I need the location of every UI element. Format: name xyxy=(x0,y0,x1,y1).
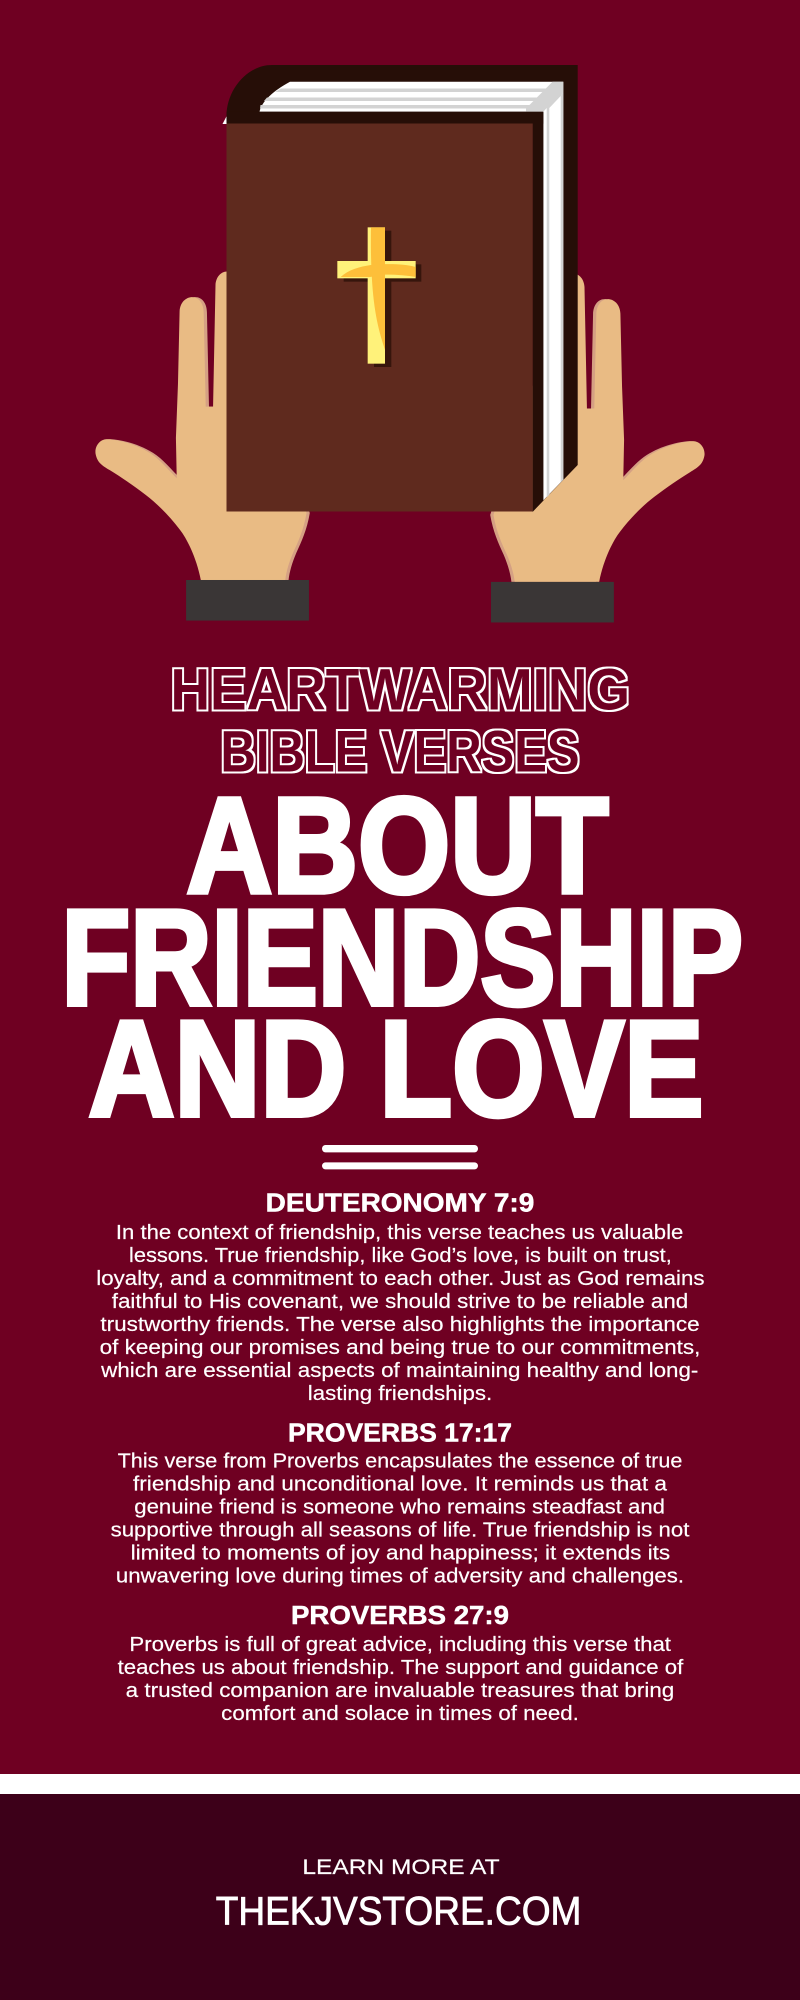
verse text: This verse from Proverbs encapsulates the essence of true xyxy=(118,1451,682,1473)
verse text: lasting friendships. xyxy=(308,1383,492,1405)
verse text: loyalty, and a commitment to each other. Just as God remains xyxy=(96,1268,705,1290)
verse text xyxy=(96,1222,705,1405)
verse text: comfort and solace in times of need. xyxy=(221,1703,579,1725)
verse text: which are essential aspects of maintaining healthy and long- xyxy=(100,1360,698,1382)
heading: outlined lines xyxy=(170,658,630,784)
section: Proverbs 17:17 xyxy=(111,1420,690,1588)
footer website: THEKJVSTORE.COM xyxy=(216,1889,581,1933)
verse text: Proverbs is full of great advice, including this verse that xyxy=(129,1634,671,1656)
icon: bible book xyxy=(222,65,578,512)
panel: footer xyxy=(0,1794,800,2000)
icon: gold cross xyxy=(337,227,421,367)
icon: left hand xyxy=(95,272,310,621)
section: Deuteronomy 7:9 xyxy=(96,1190,705,1405)
title xyxy=(62,658,743,1144)
verse heading: DEUTERONOMY 7:9 xyxy=(266,1190,534,1218)
icon: right hand xyxy=(490,273,705,622)
footer label: LEARN MORE AT xyxy=(302,1855,500,1879)
verse text: faithful to His covenant, we should strive to be reliable and xyxy=(112,1291,688,1313)
white separator band xyxy=(0,1774,800,1794)
section: Proverbs 27:9 xyxy=(118,1602,684,1725)
verse text: trustworthy friends. The verse also highlights the importance xyxy=(100,1314,700,1336)
verse text: friendship and unconditional love. It reminds us that a xyxy=(133,1474,668,1496)
verse text: lessons. True friendship, like God’s love, is built on trust, xyxy=(129,1245,672,1267)
verse text: a trusted companion are invaluable treasures that bring xyxy=(126,1680,674,1702)
verse text: of keeping our promises and being true to our commitments, xyxy=(100,1337,700,1359)
verse text: unwavering love during times of adversity and challenges. xyxy=(116,1566,684,1588)
verse text: genuine friend is someone who remains steadfast and xyxy=(134,1497,665,1519)
heading: solid lines: ABOUT xyxy=(186,769,608,921)
verse text xyxy=(118,1634,684,1725)
verse text: supportive through all seasons of life. True friendship is not xyxy=(111,1520,690,1542)
heading: outlined lines: HEARTWARMING xyxy=(170,658,630,723)
verse text: teaches us about friendship. The support and guidance of xyxy=(118,1657,684,1679)
illustration: hands holding bible xyxy=(95,65,705,622)
heading: solid lines: AND LOVE xyxy=(88,992,704,1144)
verse heading: PROVERBS 17:17 xyxy=(288,1420,512,1448)
verse text: In the context of friendship, this verse teaches us valuable xyxy=(116,1222,683,1244)
heading: solid lines xyxy=(62,769,743,1144)
verse text xyxy=(111,1451,690,1588)
double rule divider xyxy=(322,1145,478,1169)
heading: outlined lines: BIBLE VERSES xyxy=(220,719,580,784)
verse heading: PROVERBS 27:9 xyxy=(291,1602,509,1630)
verse text: limited to moments of joy and happiness; it extends its xyxy=(131,1543,670,1565)
